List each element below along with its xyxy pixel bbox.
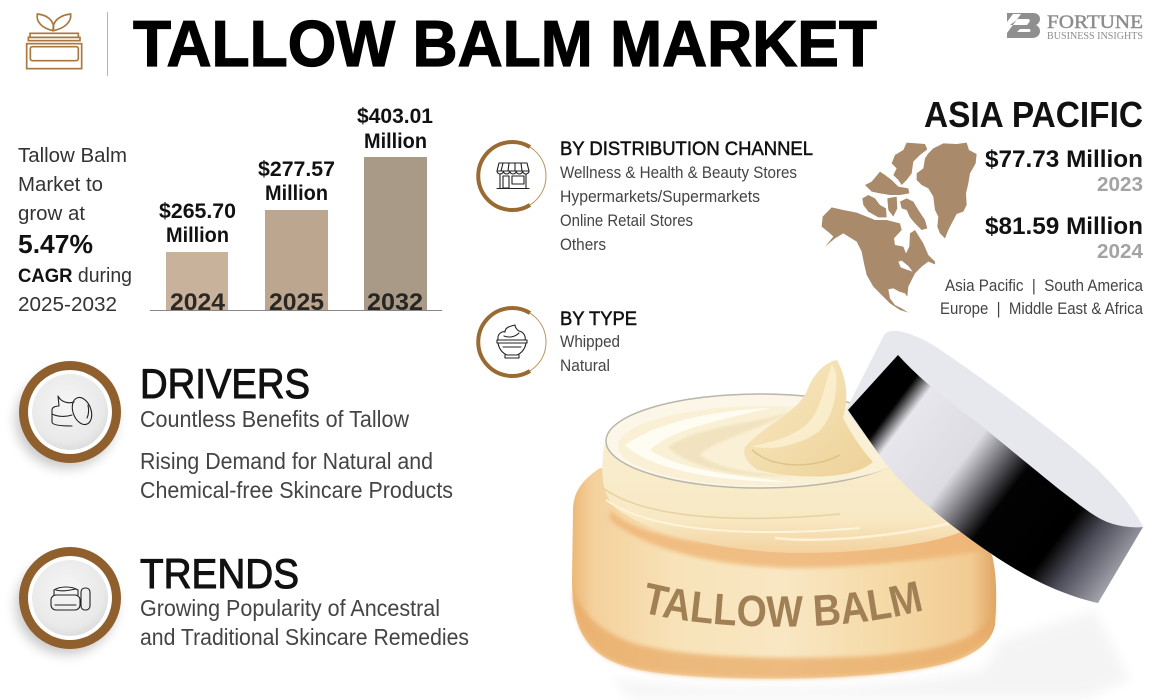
text block: CAGR summary: Market to (18, 174, 103, 196)
icon: open jar disc (16, 361, 121, 468)
text block: CAGR summary: Tallow Balm (18, 145, 127, 167)
segment list: Whipped (560, 333, 620, 351)
bar 2032 (364, 157, 427, 310)
bar chart: market size: 2032 (367, 289, 423, 316)
lid side (848, 355, 1143, 603)
icon: jar disc (16, 547, 121, 654)
bar chart: market size: $277.57 (258, 158, 335, 181)
map: North America (822, 143, 977, 313)
bar chart: market size: $265.70 (159, 200, 236, 223)
bar chart: market size: Million (166, 224, 229, 247)
region list: Europe | Middle East & Africa (940, 300, 1144, 318)
segment list: Others (560, 236, 606, 254)
segment list: Natural (560, 357, 610, 375)
cream peak (744, 360, 873, 477)
segment list: Hypermarkets/Supermarkets (560, 188, 760, 206)
heading: BY TYPE (560, 308, 637, 330)
jar neck (602, 440, 965, 553)
reflection (610, 610, 1130, 698)
logo: Fortune Business Insights (1007, 13, 1143, 42)
bar 2025 (265, 210, 328, 310)
heading: DRIVERS (140, 360, 310, 407)
panel: trends (16, 547, 469, 654)
illustration: tallow balm jar (570, 331, 1143, 692)
stat: 2024: $81.59 Million (985, 213, 1143, 240)
segment list: Online Retail Stores (560, 212, 693, 230)
region list: Asia Pacific | South America (945, 277, 1144, 295)
jar label: TALLOW BALM (646, 581, 922, 627)
logo: Fortune Business Insights: FORTUNE (1047, 13, 1143, 33)
bar chart: market size: $403.01 (357, 105, 433, 128)
stat: 2023: $77.73 Million (985, 146, 1143, 173)
driver text: Chemical-free Skincare Products (140, 477, 453, 503)
segment list (560, 333, 620, 375)
driver text: Rising Demand for Natural and (140, 448, 433, 474)
heading: BY DISTRIBUTION CHANNEL (560, 138, 813, 160)
icon: store (478, 142, 546, 210)
segment list (560, 164, 797, 254)
text block: CAGR summary: grow at (18, 203, 85, 225)
panel: by distribution channel (478, 138, 813, 254)
glass rim (606, 394, 914, 488)
icon: balm jar with leaves (27, 14, 82, 69)
text block: CAGR summary (18, 145, 132, 316)
trend text: and Traditional Skincare Remedies (140, 624, 469, 650)
bar chart: market size: Million (364, 130, 427, 153)
region list (940, 277, 1144, 318)
panel: drivers (16, 360, 453, 503)
driver text (140, 406, 453, 503)
bar chart: market size (150, 105, 442, 316)
header divider (107, 12, 108, 76)
logo: Fortune Business Insights: BUSINESS INSIGHTS (1047, 31, 1143, 42)
heading: TRENDS (140, 550, 299, 597)
heading: Asia Pacific: ASIA PACIFIC (924, 94, 1143, 135)
lid top (846, 331, 1143, 603)
stat: 2023: 2023 (1097, 174, 1143, 196)
panel: by type (478, 308, 637, 376)
icon: cream bowl (478, 308, 546, 376)
jar body (572, 468, 996, 679)
trend text: Growing Popularity of Ancestral (140, 595, 440, 621)
bar chart: market size: 2025 (269, 289, 324, 316)
stat: 2024: 2024 (1097, 241, 1144, 263)
stat: 2024 (985, 213, 1144, 263)
text block: CAGR summary: 2025-2032 (18, 294, 117, 316)
driver text: Countless Benefits of Tallow (140, 406, 409, 432)
title: TALLOW BALM MARKET (133, 7, 877, 80)
stat: 2023 (985, 146, 1143, 196)
bar chart: market size: Million (265, 182, 328, 205)
text block: CAGR summary: CAGR during (18, 265, 132, 287)
segment list: Wellness & Health & Beauty Stores (560, 164, 797, 182)
text block: CAGR summary: 5.47% (18, 229, 93, 259)
trend text (140, 595, 469, 650)
bar 2024 (166, 252, 228, 310)
panel: regional stats (822, 94, 1144, 318)
cream surface (618, 406, 912, 486)
bar chart: market size: 2024 (170, 289, 226, 316)
